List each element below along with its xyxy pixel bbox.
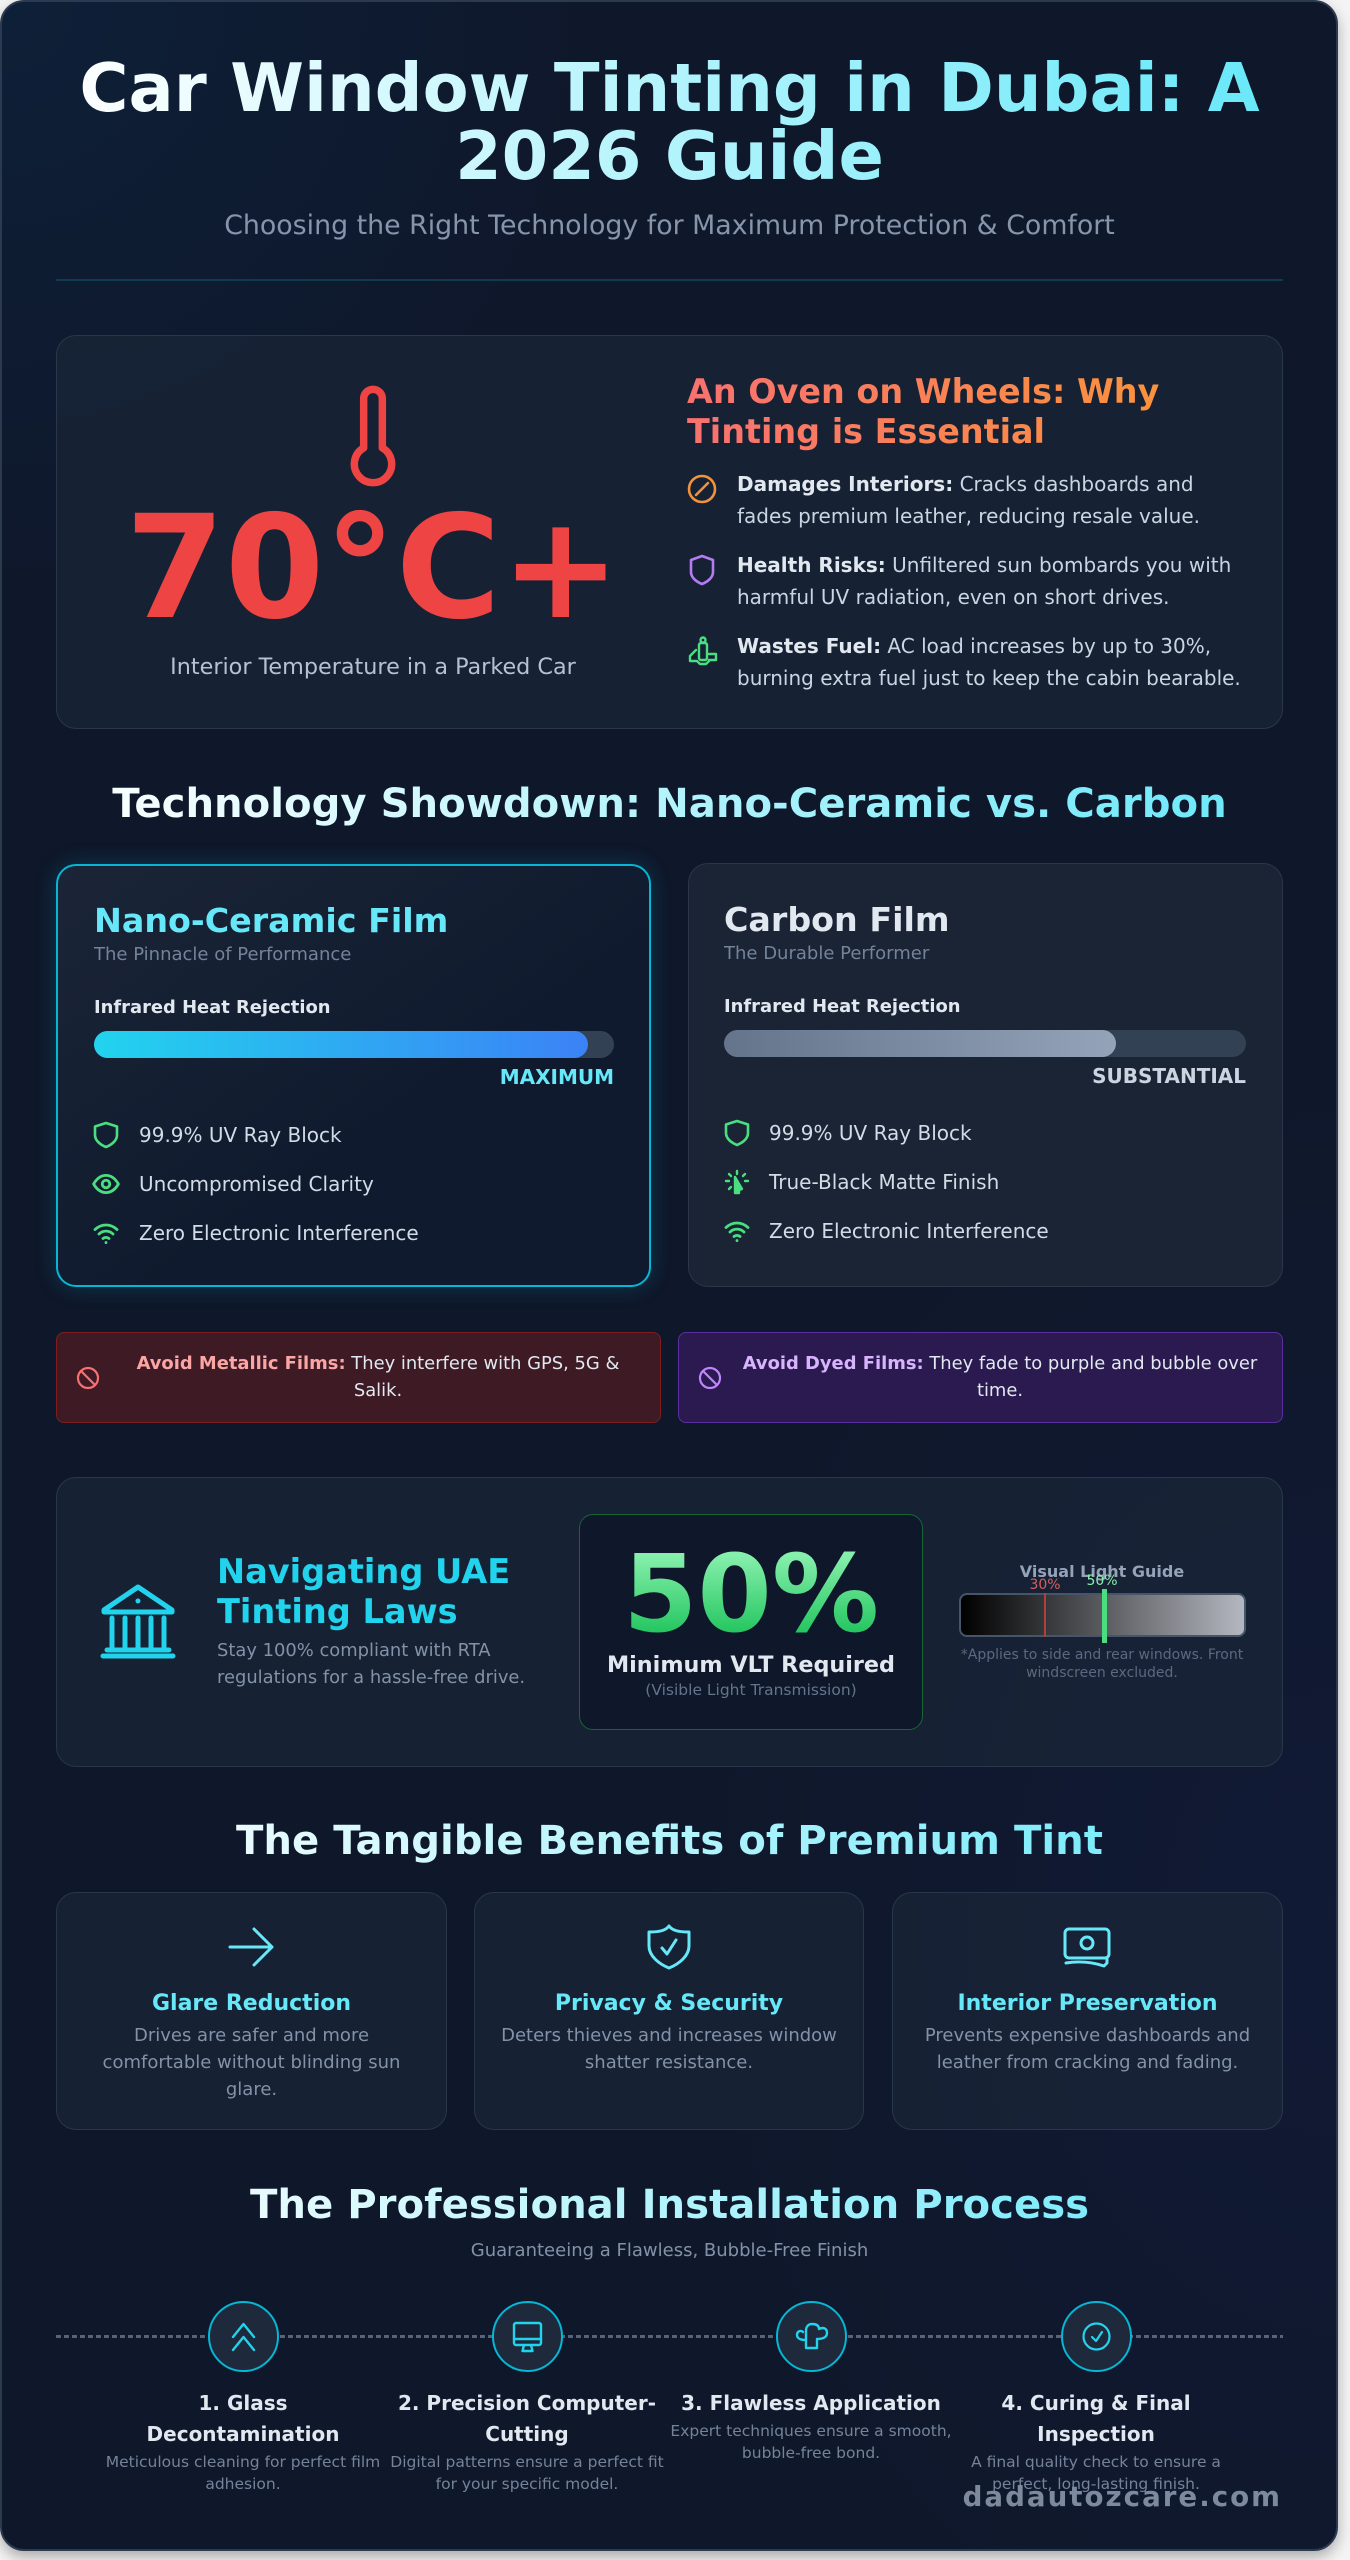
icon: prohibited purple <box>698 1366 722 1390</box>
step 1 text: adhesion. <box>205 2475 281 2493</box>
benefit text: glare: Drives are safer and more <box>134 2025 369 2046</box>
guide note: *Applies to side and rear windows. Front <box>961 1647 1243 1663</box>
icon: shield <box>724 1120 750 1146</box>
guide label: Visual Light Guide <box>1020 1562 1184 1581</box>
panel: interior preservation <box>892 1892 1283 2130</box>
text: wastes fuel <box>737 634 1241 690</box>
law heading: Navigating UAE <box>217 1552 510 1591</box>
icon: prohibited red <box>76 1366 100 1390</box>
step 4 text: A final quality check to ensure a <box>971 2453 1221 2471</box>
benefit title: privacy: Privacy & Security <box>555 1991 783 2016</box>
benefit text: glare <box>103 2025 400 2100</box>
icon: damage <box>688 474 716 504</box>
text: avoid metallic: Avoid Metallic Films: They interfere with GPS, 5G & <box>137 1353 619 1374</box>
label: infrared rejection: Infrared Heat Rejection <box>94 997 331 1018</box>
guide note: windscreen excluded. <box>1026 1665 1178 1681</box>
panel heading: oven on wheels <box>687 372 1167 452</box>
step 4 icon: check circle <box>1061 2301 1132 2372</box>
label: infrared rejection carbon: Infrared Heat Rejection <box>724 996 961 1017</box>
heading: benefits: The Tangible Benefits of Premium Tint <box>236 1818 1103 1864</box>
panel: carbon film <box>688 863 1283 1287</box>
title: Car Window Tinting in Dubai: A <box>79 49 1260 127</box>
bar: nano-ceramic heat rejection <box>94 1031 614 1058</box>
icon: health shield <box>690 554 714 586</box>
benefit text: interior <box>925 2025 1250 2073</box>
stat label: Minimum VLT Required <box>607 1652 895 1678</box>
heading: technology showdown: Technology Showdown: Nano-Ceramic vs. Carbon <box>112 781 1227 827</box>
bar: carbon heat rejection <box>724 1030 1246 1057</box>
marker label: 50%: 50% <box>1086 1573 1118 1589</box>
benefit title: glare: Glare Reduction <box>152 1991 351 2016</box>
card subtitle: carbon: The Durable Performer <box>724 943 929 964</box>
step 4 text: perfect, long-lasting finish. <box>992 2475 1200 2493</box>
icon: shield check <box>648 1924 690 1970</box>
step 3 text: bubble-free bond. <box>742 2444 880 2462</box>
law heading <box>217 1552 510 1631</box>
benefit text: privacy: shatter resistance. <box>585 2052 753 2073</box>
panel: glare reduction <box>56 1892 447 2130</box>
text: damages interiors: Damages Interiors: Cracks dashboards and <box>737 472 1194 496</box>
benefit text: glare: glare. <box>226 2079 277 2100</box>
benefit title: interior: Interior Preservation <box>957 1991 1218 2016</box>
text: health risks <box>737 553 1231 609</box>
title: 2026 Guide <box>455 117 884 195</box>
panel: privacy <box>474 1892 864 2130</box>
text: avoid metallic: Salik. <box>354 1380 402 1401</box>
bar fill <box>724 1030 1116 1057</box>
icon: fuel <box>688 636 718 666</box>
icon: government building <box>100 1584 176 1658</box>
benefit text: privacy: Deters thieves and increases window <box>501 2025 837 2046</box>
text: health risks: harmful UV radiation, even on short drives. <box>737 585 1170 609</box>
text: avoid dyed <box>742 1353 1258 1401</box>
text: damages interiors: fades premium leather, reducing resale value. <box>737 504 1200 528</box>
bar value: maximum: MAXIMUM <box>500 1065 614 1089</box>
marker label: 30%: 30% <box>1029 1577 1061 1593</box>
icon: arrow <box>228 1927 274 1967</box>
feature: uv block: 99.9% UV Ray Block <box>139 1123 342 1147</box>
card title: nano-ceramic: Nano-Ceramic Film <box>94 901 448 940</box>
card subtitle: nano-ceramic: The Pinnacle of Performance <box>94 944 351 965</box>
feature: matte finish: True-Black Matte Finish <box>769 1170 999 1194</box>
step 4 text <box>971 2391 1221 2493</box>
step 3 text <box>670 2391 952 2462</box>
feature: clarity: Uncompromised Clarity <box>139 1172 374 1196</box>
heading: benefits <box>56 1813 1283 1869</box>
step 3 text: 3. Flawless Application <box>681 2391 941 2415</box>
benefit text: interior: Prevents expensive dashboards and <box>925 2025 1250 2046</box>
text: avoid metallic <box>136 1353 619 1401</box>
panel heading: oven on wheels: An Oven on Wheels: Why <box>687 372 1159 411</box>
step 3 text: Expert techniques ensure a smooth, <box>670 2422 952 2440</box>
title <box>56 54 1283 190</box>
step 2 text: 2. Precision Computer- <box>398 2391 656 2415</box>
subtitle: Choosing the Right Technology for Maximum Protection & Comfort <box>224 210 1115 241</box>
marker: 30% <box>1044 1593 1046 1637</box>
benefit text: glare: comfortable without blinding sun <box>103 2052 400 2073</box>
icon: wifi <box>724 1222 750 1242</box>
step 1 text: Decontamination <box>147 2422 339 2446</box>
watermark: dadautozcare.com <box>963 2480 1282 2513</box>
text: damages interiors <box>737 472 1200 528</box>
panel: uae laws <box>56 1477 1283 1767</box>
marker: 50% <box>1102 1589 1107 1643</box>
law heading: Tinting Laws <box>217 1592 458 1631</box>
step 2 icon: monitor <box>492 2301 563 2372</box>
text: avoid dyed: time. <box>977 1380 1023 1401</box>
icon: thermometer <box>350 386 396 486</box>
step 1 text: 1. Glass <box>198 2391 288 2415</box>
benefit text: privacy <box>501 2025 837 2073</box>
heading: installation process <box>56 2177 1283 2233</box>
step 3 icon: application <box>776 2301 847 2372</box>
icon: sparkle pointer <box>724 1170 750 1194</box>
benefit text: interior: leather from cracking and fading. <box>937 2052 1238 2073</box>
panel heading: oven on wheels: Tinting is Essential <box>687 412 1045 451</box>
step 1 text: Meticulous cleaning for perfect film <box>106 2453 380 2471</box>
icon: eye <box>92 1174 120 1194</box>
bar fill <box>94 1031 588 1058</box>
step 4 text: Inspection <box>1037 2422 1155 2446</box>
icon: cash roll <box>1064 1928 1110 1968</box>
process subtitle: Guaranteeing a Flawless, Bubble-Free Finish <box>471 2240 868 2261</box>
guide note <box>961 1647 1243 1681</box>
callout: avoid metallic <box>56 1332 661 1423</box>
chart: visual light guide bar <box>959 1593 1246 1637</box>
panel: heat problem <box>56 335 1283 729</box>
feature: uv block: 99.9% UV Ray Block <box>769 1121 972 1145</box>
text: avoid dyed: Avoid Dyed Films: They fade to purple and bubble over <box>743 1353 1257 1374</box>
stat caption: Interior Temperature in a Parked Car <box>170 654 576 680</box>
step 2 text: Digital patterns ensure a perfect fit <box>390 2453 664 2471</box>
step 2 text: for your specific model. <box>436 2475 618 2493</box>
heading: installation process: The Professional Installation Process <box>250 2182 1089 2228</box>
bar value: substantial: SUBSTANTIAL <box>1092 1064 1246 1088</box>
callout: avoid dyed <box>678 1332 1283 1423</box>
big temperature stat: 70°C+ <box>125 484 621 651</box>
text: health risks: Health Risks: Unfiltered sun bombards you with <box>737 553 1231 577</box>
law text: Stay 100% compliant with RTA <box>217 1640 491 1661</box>
big stat: 50% <box>579 1529 923 1661</box>
icon: wifi <box>94 1224 118 1244</box>
big stat: 50%: 50% <box>623 1533 879 1657</box>
law text <box>217 1640 525 1688</box>
law text: regulations for a hassle-free drive. <box>217 1667 525 1688</box>
step 4 text: 4. Curing & Final <box>1001 2391 1191 2415</box>
card title: carbon: Carbon Film <box>724 900 950 939</box>
panel: nano-ceramic film <box>56 864 651 1287</box>
stat sublabel: (Visible Light Transmission) <box>645 1681 857 1699</box>
step 2 text <box>390 2391 664 2493</box>
step 1 icon: chevrons <box>208 2301 279 2372</box>
icon: shield <box>94 1122 118 1148</box>
text: wastes fuel: burning extra fuel just to keep the cabin bearable. <box>737 666 1241 690</box>
feature: interference: Zero Electronic Interference <box>769 1219 1049 1243</box>
stat box: 50% vlt <box>579 1514 923 1730</box>
step 2 text: Cutting <box>485 2422 569 2446</box>
feature: interference: Zero Electronic Interference <box>139 1221 419 1245</box>
text: wastes fuel: Wastes Fuel: AC load increases by up to 30%, <box>737 634 1211 658</box>
step 1 text <box>106 2391 380 2493</box>
